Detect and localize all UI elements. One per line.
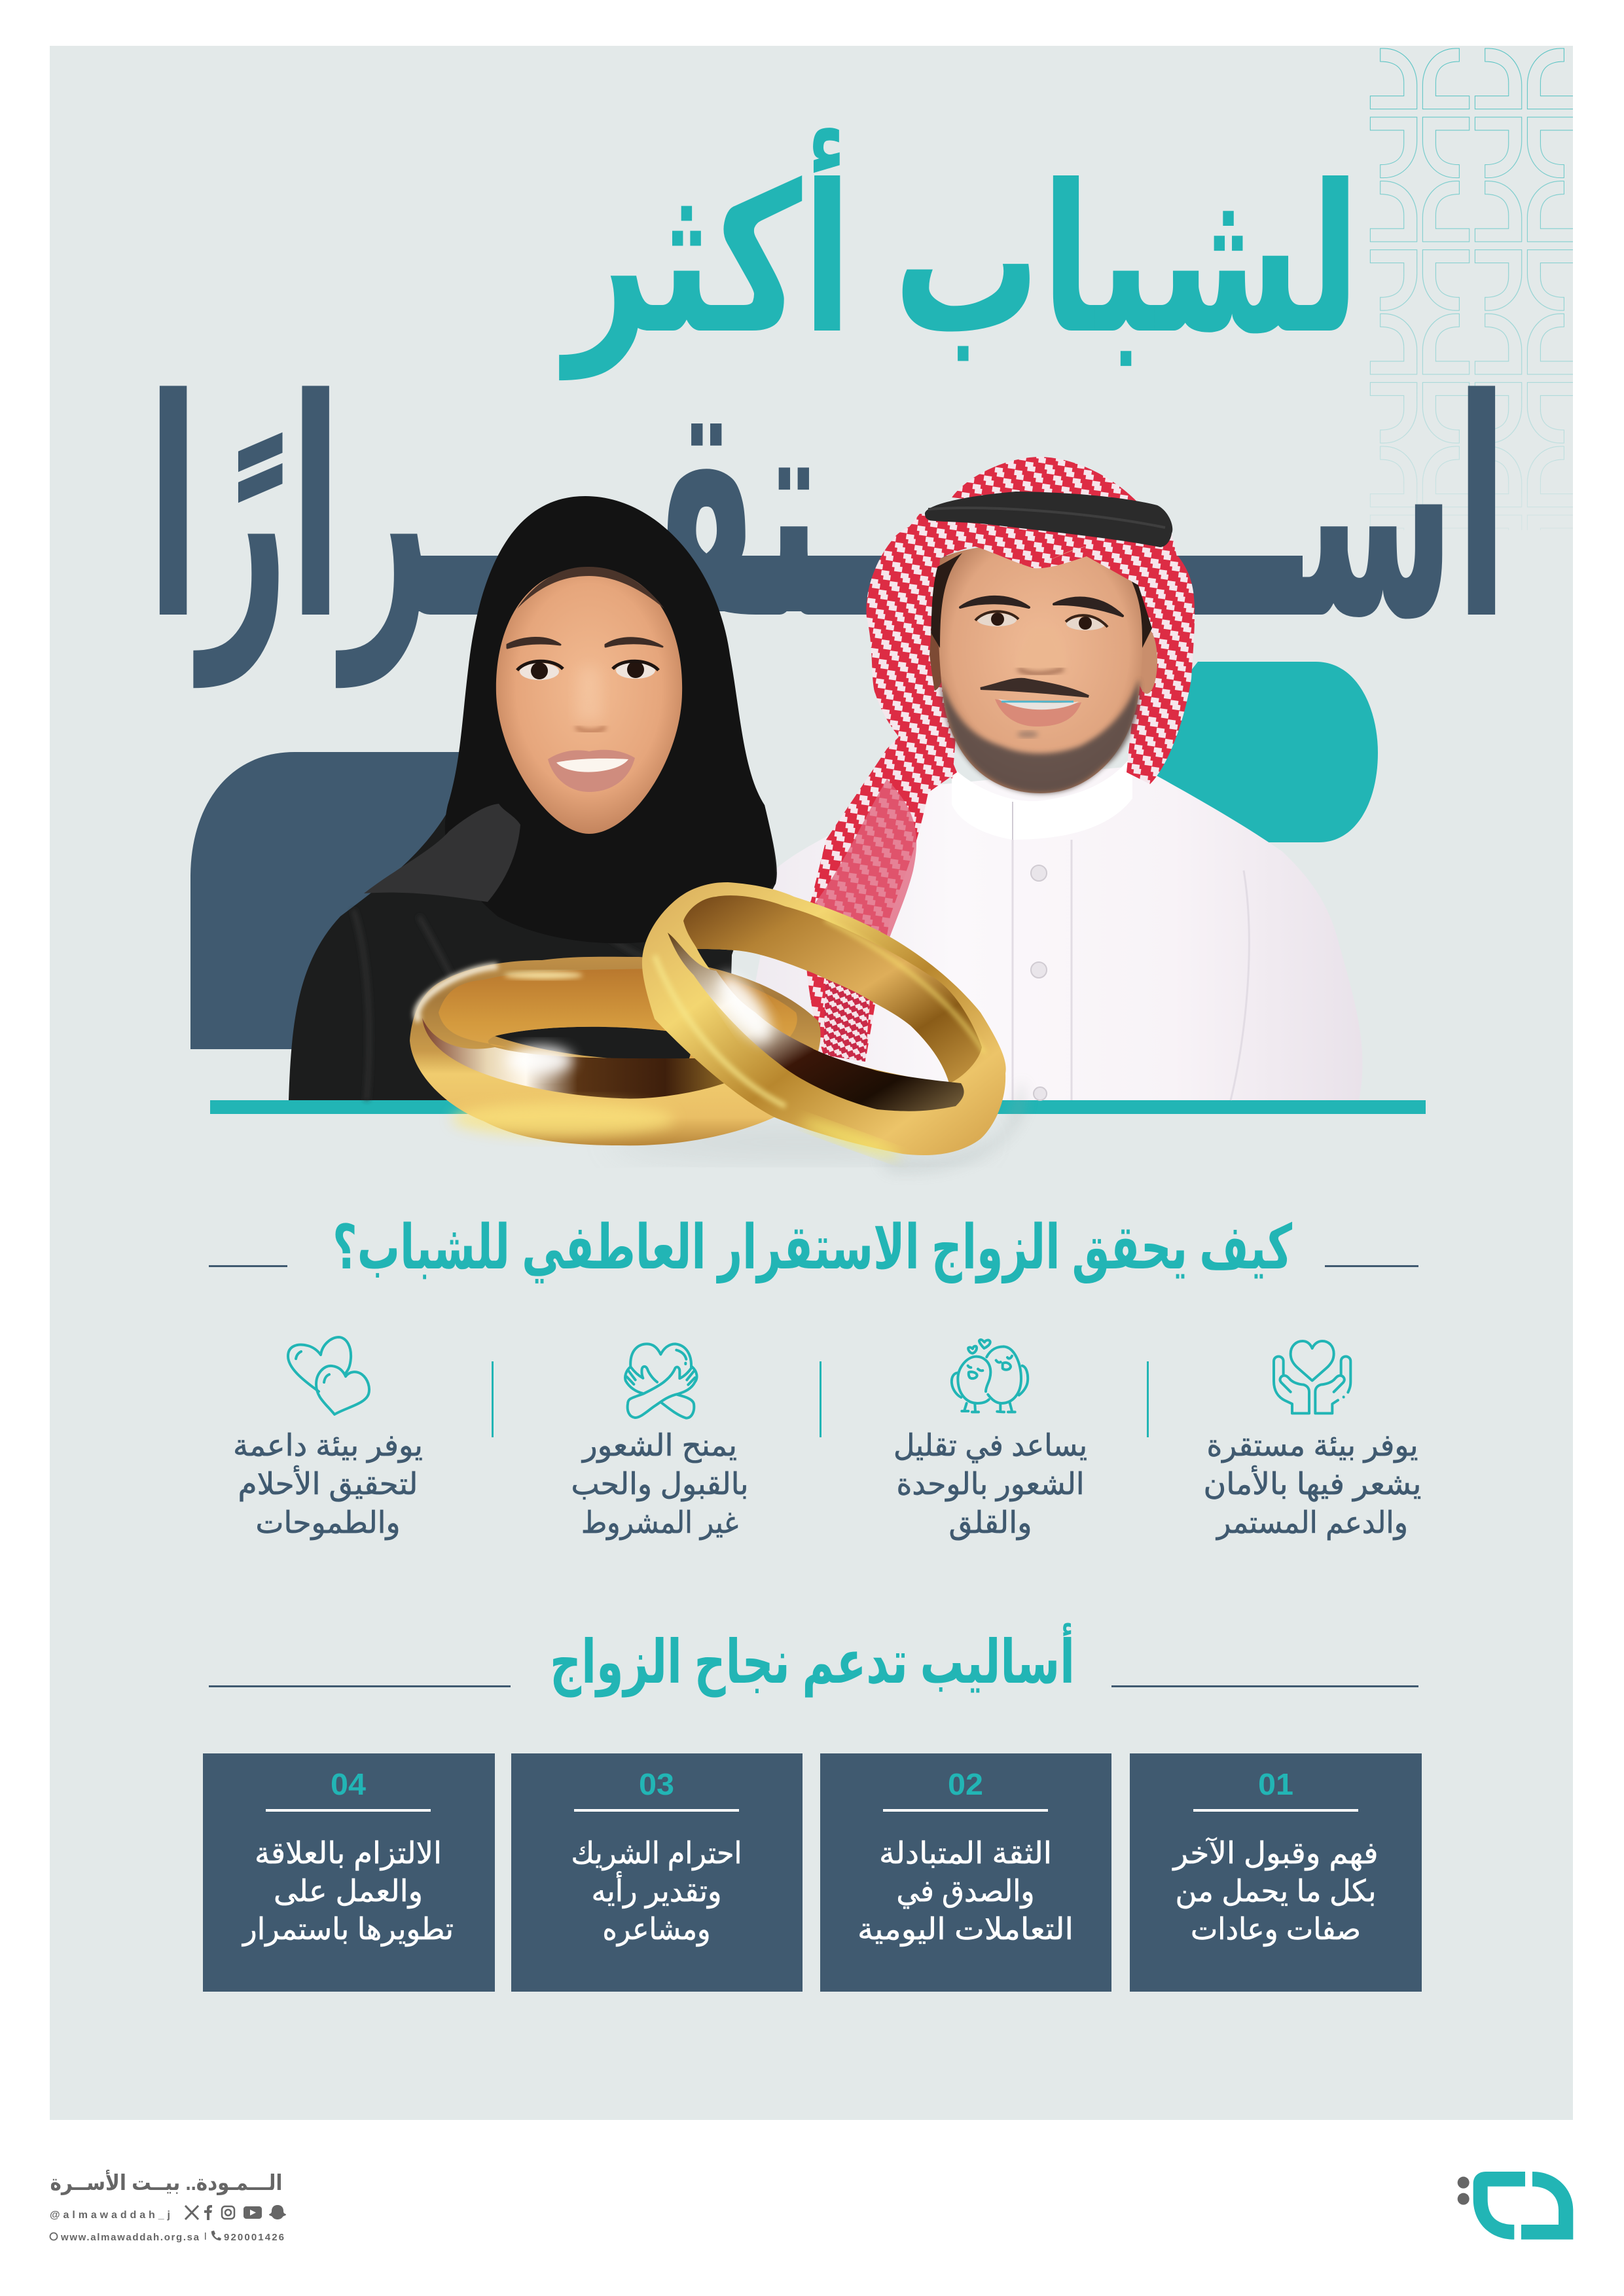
card 03 [511, 1753, 803, 1992]
card 01: 01 [1258, 1767, 1293, 1801]
card 02: والصدق في [897, 1874, 1034, 1909]
card 02: 02 [948, 1767, 983, 1801]
card 03: 03 [639, 1767, 674, 1801]
logo [1458, 2172, 1573, 2240]
background pattern [1370, 48, 1574, 576]
man eyebrows [960, 597, 1123, 616]
card 04: والعمل على [274, 1874, 423, 1909]
text: benefit 3: بالقبول والحب [571, 1467, 749, 1502]
ghutra forehead band [896, 514, 1178, 585]
man moustache and mouth [981, 679, 1089, 726]
man chin tuft [1017, 731, 1038, 738]
icon: arms hugging heart [625, 1344, 697, 1418]
hijab shiny fold [364, 804, 520, 902]
teal baseline bar [210, 1100, 1426, 1114]
woman nose [576, 726, 605, 732]
icon: x [185, 2206, 198, 2219]
ring 2 interior [683, 895, 982, 1083]
text: benefit 4: والطموحات [255, 1505, 401, 1541]
text: benefit 1: يوفر بيئة مستقرة [1207, 1428, 1418, 1463]
ring 1 [410, 957, 821, 1145]
man thobe [733, 766, 1362, 1100]
ring 1 body [410, 957, 821, 1145]
footer: website and phone: 920001426 [224, 2232, 284, 2243]
card 01: فهم وقبول الآخر [1172, 1836, 1379, 1871]
woman hairline [517, 567, 664, 609]
card 01 [1130, 1753, 1422, 1992]
icon: youtube [244, 2206, 262, 2219]
text: benefit 4: يوفر بيئة داعمة [233, 1428, 423, 1463]
text: benefit 2: يساعد في تقليل [893, 1428, 1087, 1463]
icon: facebook [204, 2205, 212, 2220]
ring shadow [609, 1126, 988, 1158]
hair shadow [928, 553, 1152, 648]
footer: website and phone: www.almawaddah.org.sa [60, 2232, 200, 2243]
text: benefit 1: والدعم المستمر [1216, 1505, 1408, 1541]
heading: methods supporting marriage: أساليب تدعم نجاح الزواج [550, 1623, 1075, 1698]
text: benefit 2 [893, 1428, 1087, 1541]
card 03: ومشاعره [602, 1912, 711, 1947]
woman mouth [548, 750, 635, 792]
icon: two hearts [288, 1337, 369, 1414]
icon: hands holding heart [1274, 1341, 1350, 1413]
card 03: احترام الشريك [571, 1836, 742, 1871]
ring 2 lower dark band [668, 933, 964, 1111]
text: benefit 3 [571, 1428, 749, 1541]
man agal [925, 492, 1172, 547]
icon: instagram [222, 2206, 234, 2219]
rings [410, 882, 1025, 1172]
text: benefit 2: والقلق [949, 1505, 1032, 1541]
card 02: الثقة المتبادلة [879, 1836, 1052, 1870]
woman face [496, 568, 682, 834]
card 01: صفات وعادات [1191, 1912, 1361, 1947]
ring 1 dark band [422, 1018, 746, 1099]
footer: slogan: الـــمـودة.. بيــت الأســرة [50, 2169, 283, 2196]
footer: website and phone [50, 2231, 284, 2243]
thobe folds [1013, 840, 1249, 1100]
shape: teal blob [1152, 662, 1378, 842]
heading: methods supporting marriage [209, 1623, 1418, 1698]
woman hijab [445, 496, 776, 943]
photo: woman [289, 496, 777, 1100]
ghutra back and right side [867, 521, 1195, 784]
footer: social icons [185, 2205, 286, 2220]
photo: man [733, 457, 1362, 1100]
woman body [289, 805, 777, 1100]
text: benefit 4 [233, 1428, 423, 1541]
shape: dark blue blob [190, 752, 524, 1049]
card 04: 04 [331, 1767, 366, 1801]
ring 1 highlights [504, 971, 583, 979]
text: benefit 3: غير المشروط [581, 1505, 738, 1541]
ring 1 interior [439, 969, 797, 1060]
man neck and collar [952, 755, 1132, 840]
woman eyebrows [507, 637, 662, 648]
card 02 [820, 1753, 1111, 1992]
icon: snapchat [269, 2205, 286, 2219]
man buttons [1031, 865, 1047, 1100]
man nose [1016, 628, 1066, 675]
card 03: وتقدير رأيه [592, 1871, 721, 1909]
footer: handle: @almawaddah_j [50, 2210, 170, 2221]
ghutra front [805, 522, 1138, 1062]
ghutra strip embroidery [815, 779, 916, 982]
icon: love birds [952, 1340, 1028, 1412]
card 04: تطويرها باستمرار [242, 1912, 454, 1947]
card 04 [203, 1753, 495, 1992]
woman eyes [517, 661, 659, 680]
man ears [920, 618, 946, 691]
man face [938, 545, 1143, 793]
man eyes [975, 611, 1108, 630]
ring 2 [642, 882, 1006, 1163]
text: benefit 2: الشعور بالوحدة [897, 1467, 1084, 1502]
card 04: الالتزام بالعلاقة [255, 1836, 442, 1871]
card 02: التعاملات اليومية [857, 1912, 1074, 1947]
dividers [492, 1361, 1149, 1437]
text: benefit 1 [1203, 1428, 1422, 1541]
ring 2 highlights [710, 967, 780, 1049]
ring 2 body [642, 882, 1006, 1155]
man beard [940, 679, 1140, 793]
card 01: بكل ما يحمل من [1176, 1874, 1376, 1909]
body folds [353, 844, 655, 1100]
text: benefit 1: يشعر فيها بالأمان [1203, 1465, 1422, 1502]
ghutra crown [952, 457, 1142, 507]
text: benefit 4: لتحقيق الأحلام [238, 1465, 418, 1502]
text: benefit 3: يمنح الشعور [581, 1428, 737, 1463]
